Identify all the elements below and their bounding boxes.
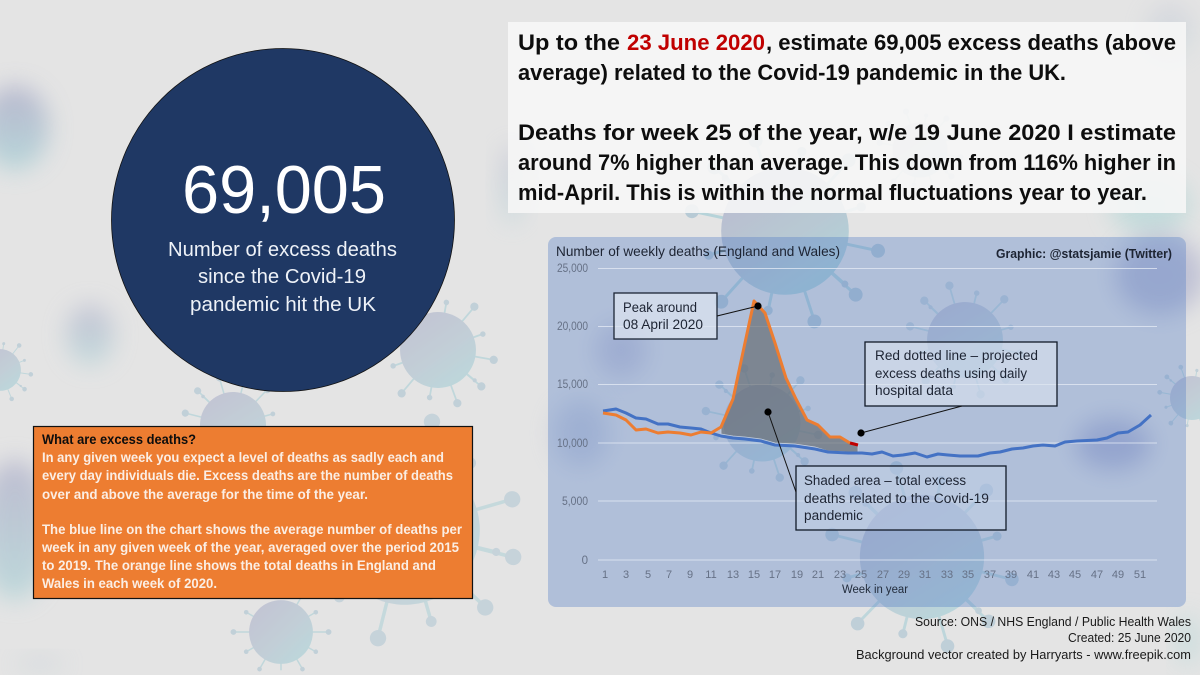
x axis title: Week in year	[842, 584, 908, 596]
callout: peak: Peak around	[623, 300, 697, 315]
headline text panel: Up to the	[518, 30, 620, 55]
y axis labels: 15,000	[557, 379, 588, 391]
x axis labels: 15	[748, 569, 760, 581]
x axis labels: 45	[1069, 569, 1081, 581]
callout: shaded area	[764, 408, 1006, 530]
x axis labels: 9	[687, 569, 693, 581]
x axis labels: 41	[1027, 569, 1039, 581]
panel heading: What are excess deaths?	[42, 432, 196, 447]
headline text panel	[508, 22, 1186, 213]
callout: red dotted line: hospital data	[875, 383, 953, 398]
headline text panel: Deaths for week 25 of the year, w/e 19 June 2020 I estimate	[518, 120, 1176, 145]
x axis labels: 37	[984, 569, 996, 581]
callout: shaded area: deaths related to the Covid-19	[804, 491, 989, 506]
x axis labels: 13	[727, 569, 739, 581]
panel body text	[41, 450, 463, 591]
source and credits	[856, 614, 1191, 662]
blue average line	[603, 409, 1151, 457]
y axis labels: 0	[582, 555, 588, 567]
callout: red dotted line: Red dotted line – projected	[875, 348, 1038, 363]
x axis labels: 49	[1112, 569, 1124, 581]
source and credits: Background vector created by Harryarts - www.freepik.com	[856, 647, 1191, 662]
headline text panel: around 7% higher than average. This down from 116% higher in	[518, 150, 1176, 175]
callout: peak: 08 April 2020	[623, 317, 703, 332]
callout: peak	[614, 293, 762, 339]
x axis labels: 19	[791, 569, 803, 581]
x axis labels: 39	[1005, 569, 1017, 581]
circle caption: since the Covid-19	[198, 266, 366, 288]
chart panel	[548, 237, 1186, 607]
x axis labels: 17	[769, 569, 781, 581]
x axis labels: 43	[1048, 569, 1060, 581]
y axis labels	[557, 263, 588, 567]
callout: red dotted line: excess deaths using daily	[875, 366, 1027, 381]
headline text panel: average) related to the Covid-19 pandemic in the UK.	[518, 60, 1066, 85]
panel body text: to 2019. The orange line shows the total deaths in England and	[42, 558, 436, 573]
x axis labels	[602, 569, 1146, 581]
orange 2020 line	[603, 301, 850, 443]
x axis labels: 5	[645, 569, 651, 581]
gridlines	[598, 268, 1157, 560]
panel body text: Wales in each week of 2020.	[42, 576, 217, 591]
shaded excess area	[721, 301, 858, 452]
y axis labels: 10,000	[557, 438, 588, 450]
x axis labels: 11	[705, 569, 717, 581]
source and credits: Created: 25 June 2020	[1068, 630, 1191, 645]
callout: red dotted line	[857, 342, 1057, 437]
x axis labels: 23	[834, 569, 846, 581]
panel body text: In any given week you expect a level of deaths as sadly each and	[42, 450, 444, 465]
circle caption: Number of excess deaths	[168, 239, 397, 261]
x axis labels: 7	[666, 569, 672, 581]
big number circle	[112, 48, 454, 392]
big number: 69,005	[182, 152, 386, 228]
circle caption: pandemic hit the UK	[190, 294, 377, 316]
source and credits: Source: ONS / NHS England / Public Health Wales	[915, 614, 1191, 629]
headline text panel: mid-April. This is within the normal fluctuations year to year.	[518, 180, 1147, 205]
graphic credit: Graphic: @statsjamie (Twitter)	[996, 246, 1172, 261]
x axis labels: 25	[855, 569, 867, 581]
x axis labels: 3	[623, 569, 629, 581]
panel: what are excess deaths	[34, 426, 472, 598]
callout: shaded area: pandemic	[804, 508, 863, 523]
chart title: Number of weekly deaths (England and Wales)	[556, 243, 840, 259]
circle caption	[168, 239, 397, 316]
headline text panel: , estimate 69,005 excess deaths (above	[766, 30, 1176, 55]
red projected line	[850, 443, 858, 445]
y axis labels: 5,000	[562, 496, 588, 508]
x axis labels: 51	[1134, 569, 1146, 581]
y axis labels: 20,000	[557, 321, 588, 333]
x axis labels: 33	[941, 569, 953, 581]
line chart	[557, 263, 1157, 596]
x axis labels: 1	[602, 569, 608, 581]
x axis labels: 47	[1091, 569, 1103, 581]
headline text panel: 23 June 2020	[627, 30, 765, 55]
panel body text: week in any given week of the year, averaged over the period 2015	[41, 540, 459, 555]
x axis labels: 27	[877, 569, 889, 581]
y axis labels: 25,000	[557, 263, 588, 275]
callout: shaded area: Shaded area – total excess	[804, 473, 966, 488]
panel body text: every day individuals die. Excess deaths are the number of deaths	[42, 468, 453, 483]
x axis labels: 21	[812, 569, 824, 581]
panel body text: over and above the average for the time of the year.	[42, 487, 368, 502]
panel body text: The blue line on the chart shows the average number of deaths per	[42, 522, 463, 537]
x axis labels: 29	[898, 569, 910, 581]
x axis labels: 35	[962, 569, 974, 581]
x axis labels: 31	[919, 569, 931, 581]
